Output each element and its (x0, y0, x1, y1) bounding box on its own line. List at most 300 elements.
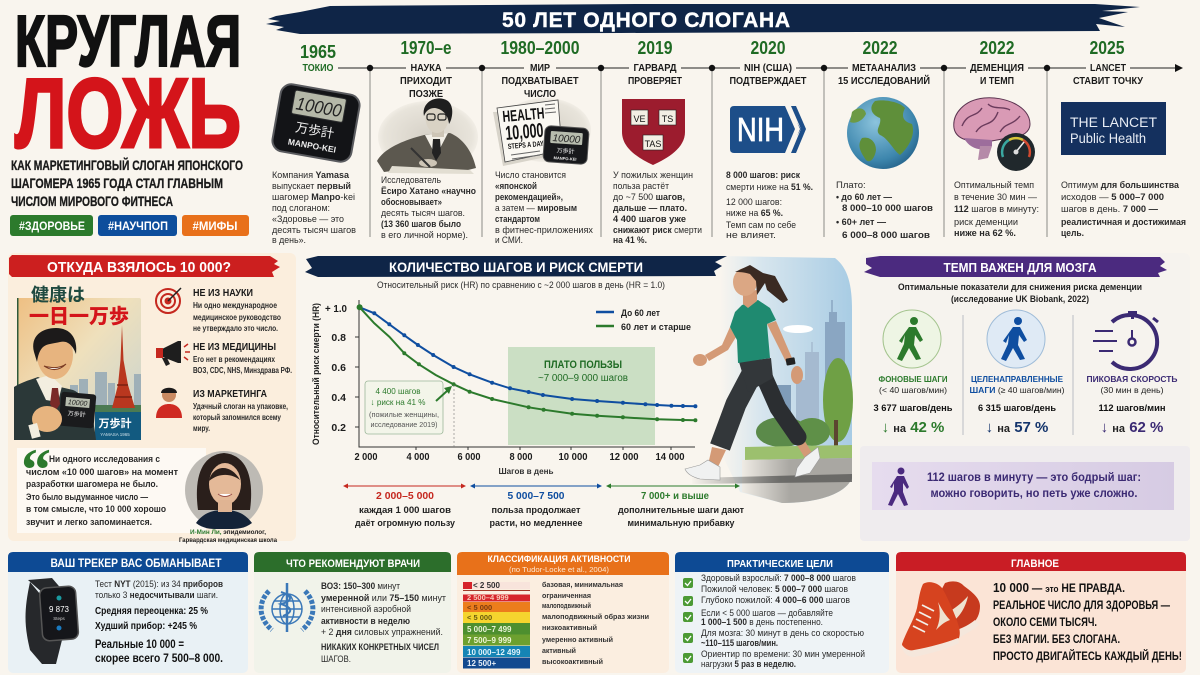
icon: newspaper with pedometer: 万歩計 (556, 145, 575, 156)
x-axis labels: 6 000 (458, 451, 481, 463)
x-axis labels: 2 000 (354, 451, 378, 463)
stat: background steps: ФОНОВЫЕ ШАГИ (878, 374, 948, 384)
icon: pedometer: MANPO-KEI (287, 137, 337, 155)
subheading (838, 62, 930, 87)
poster illustration (14, 281, 141, 440)
timeline axis (296, 60, 1183, 237)
hashtags (10, 215, 249, 236)
icon: Harvard shield (622, 99, 685, 165)
who recommendations: интенсивной аэробной (321, 604, 411, 615)
icon: Lancet logo (1061, 102, 1166, 155)
benefit range: 5 000-7 500: 5 000–7 500 (508, 490, 565, 502)
x-axis labels: 8 000 (510, 451, 533, 463)
callout: 4 400 steps: 4 400 шагов (376, 386, 421, 396)
poster illustration: 万歩計 (98, 415, 132, 431)
step ranges (463, 581, 530, 668)
reason: not from medicine: Его нет в рекомендациях (193, 355, 275, 364)
activity labels (542, 580, 649, 666)
activity labels: активный (542, 646, 576, 655)
text: 2019 (613, 170, 702, 246)
stat: peak speed: ↓ на 62 % (1101, 419, 1163, 436)
x-axis labels: Шагов в день (498, 466, 554, 476)
stat: peak speed: ПИКОВАЯ СКОРОСТЬ (1086, 374, 1178, 384)
icon: newspaper with pedometer: 10000 (552, 133, 581, 146)
benefit range: 2 000-5 000: каждая 1 000 шагов (359, 505, 451, 516)
who recommendations: активности в неделю (321, 616, 410, 627)
icon: target (156, 288, 181, 313)
x-axis labels: 4 000 (406, 451, 430, 463)
callout: 4 400 steps (365, 381, 454, 447)
reason: from marketing: который запомнился всему (193, 413, 281, 422)
icon: fitness band: 9 873 (49, 605, 70, 614)
stat: purposeful steps: ШАГИ (≥ 40 шагов/мин) (970, 385, 1065, 395)
icon: newspaper with pedometer: MANPO-KEI (553, 155, 577, 162)
subheading: ПРОВЕРЯЕТ (628, 75, 682, 87)
hashtags: #НАУЧПОП (108, 219, 168, 233)
text: 1970s: обосновывает» (381, 197, 442, 208)
panel heading (896, 552, 1186, 571)
panel heading: КОЛИЧЕСТВО ШАГОВ И РИСК СМЕРТИ (389, 260, 643, 275)
callout: brisk pace: можно говорить, но петь уже сложно. (930, 486, 1138, 500)
text: meta-analysis: Плато: (836, 180, 866, 191)
icon: purple walker (888, 468, 909, 506)
who recommendations: ШАГОВ. (321, 654, 351, 665)
goals list: Здоровый взрослый: 7 000–8 000 шагов (701, 573, 856, 584)
step ranges: < 5 000 (467, 603, 492, 612)
goals list: Для мозга: 30 минут в день со скоростью (701, 628, 864, 639)
text: 2019: польза растёт (613, 181, 670, 192)
benefit range: 2 000-5 000: даёт огромную пользу (355, 518, 456, 529)
tracker facts: Худший прибор: +245 % (95, 620, 197, 632)
subheading (730, 62, 807, 87)
main title: ЛОЖЬ (15, 58, 241, 168)
text: 1970s (381, 175, 476, 241)
benefit range: 7 000+: минимальную прибавку (628, 518, 735, 529)
subheading: NIH (США) (744, 62, 792, 74)
subheading: И ТЕМП (980, 75, 1014, 87)
icon: pedometer (271, 83, 361, 163)
icon: newspaper with pedometer: STEPS A DAY (507, 139, 544, 151)
icon: pedometer: 10000 (294, 93, 343, 121)
goals list: ~110–115 шагов/мин. (701, 638, 778, 649)
text: dementia (954, 180, 1039, 239)
icon: Lancet logo: THE LANCET (1070, 115, 1157, 130)
text: 1965: «Здоровье — это (272, 214, 344, 225)
x-axis labels: 10 000 (558, 451, 588, 463)
reason: not from science: не утверждало это число. (193, 324, 278, 333)
icon: NIH logo: NIH (737, 111, 784, 148)
icon: newspaper with pedometer: HEALTH (502, 105, 545, 126)
benefit range: 2 000-5 000: 2 000–5 000 (376, 490, 434, 502)
stat: purposeful steps (970, 310, 1065, 436)
who recommendations: ВОЗ: 150–300 минут (321, 581, 401, 592)
text: meta-analysis: • до 60 лет — (836, 192, 892, 203)
plateau zone: ~7 000–9 000 шагов (538, 373, 628, 384)
icon: megaphone (156, 341, 190, 366)
tracker facts: скорее всего 7 500–8 000. (95, 653, 223, 665)
portrait: I-Min Lee (185, 451, 263, 529)
panel heading: (по Tudor-Locke et al., 2004) (509, 567, 609, 574)
text: meta-analysis: 6 000–8 000 шагов (842, 230, 930, 241)
text: 1965 (272, 170, 356, 246)
subtitle: Оптимальные показатели для снижения риска деменции (898, 282, 1142, 292)
panel: practical goals (675, 552, 889, 673)
quote block: числом «10 000 шагов» на момент (26, 467, 178, 478)
icon: Harvard shield: VE (633, 114, 646, 124)
takeaway text (993, 580, 1182, 663)
goals list (701, 573, 865, 670)
y-axis labels: Относительный риск смерти (HR) (311, 303, 322, 445)
panel heading: КЛАССИФИКАЦИЯ АКТИВНОСТИ (488, 554, 631, 565)
subheading: 15 ИССЛЕДОВАНИЙ (838, 74, 930, 87)
y-axis labels: 0.2 (331, 422, 346, 434)
callout: brisk pace (860, 446, 1190, 541)
text: meta-analysis: • 60+ лет — (836, 217, 886, 228)
reason: not from medicine: НЕ ИЗ МЕДИЦИНЫ (193, 342, 276, 353)
text: meta-analysis: 8 000–10 000 шагов (842, 203, 933, 214)
text: 1970s: десять тысяч шагов. (381, 208, 465, 219)
text: 2025: цель. (1061, 228, 1084, 239)
timeline heading banner (266, 4, 1140, 34)
panel heading (254, 552, 451, 572)
text: dementia: Оптимальный темп (954, 180, 1034, 191)
panel: key takeaway (896, 552, 1186, 673)
activity labels: умеренно активный (542, 635, 613, 644)
curve: under 60 (360, 307, 697, 408)
icon: Harvard shield: TAS (645, 139, 661, 149)
runner figure (685, 265, 820, 480)
y-axis labels (311, 303, 347, 445)
subheading (1073, 62, 1143, 87)
plateau zone (508, 347, 655, 445)
milestone: 1965 Tokyo: ТОКИО (302, 62, 334, 74)
y-axis labels: 0.4 (331, 392, 346, 404)
panel heading (457, 552, 669, 575)
panel: activity classification (457, 552, 669, 673)
milestone: 2020 NIH (726, 38, 813, 241)
goals list: Ориентир по времени: 30 мин умеренной (701, 649, 865, 660)
subheading (628, 62, 682, 87)
quote block: разработки шагомера не было. (26, 479, 158, 490)
icon: fitness band (26, 578, 79, 664)
stat: background steps: (< 40 шагов/мин) (879, 385, 947, 395)
text: 2020: Темп сам по себе (726, 220, 796, 231)
text: 1970s: Исследователь (381, 175, 441, 186)
subheading: СТАВИТ ТОЧКУ (1073, 75, 1143, 87)
main title: КРУГЛАЯ (15, 2, 241, 82)
milestone: 2022 dementia: 2022 (980, 38, 1014, 58)
milestone: 1965 Tokyo (271, 42, 361, 246)
text: 2025 (1061, 180, 1186, 239)
milestone: 1980-2000 (493, 38, 593, 246)
panel heading: ГЛАВНОЕ (1011, 558, 1059, 570)
goals list: Глубоко пожилой: 4 000–6 000 шагов (701, 595, 850, 606)
subheading: НАУКА (410, 62, 442, 74)
text: 2019: 4 400 шагов уже (613, 214, 686, 225)
benefit range: 5 000-7 500: польза продолжает (492, 505, 581, 516)
poster illustration: YAMASA 1965 (100, 432, 130, 437)
goals list: нагрузки 5 раз в неделю. (701, 659, 796, 670)
step ranges: 2 500–4 999 (467, 593, 509, 602)
portrait caption (179, 529, 277, 544)
step ranges: 12 500+ (467, 659, 496, 668)
callout: brisk pace: 112 шагов в минуту — это бодрый шаг: (927, 470, 1141, 484)
x-axis labels: 14 000 (656, 451, 685, 463)
icon: WHO emblem (261, 583, 313, 632)
subheading: ЧИСЛО (524, 88, 556, 100)
stat: peak speed (1086, 311, 1178, 436)
text: 2020: 12 000 шагов: (726, 197, 782, 208)
panel heading (675, 552, 889, 572)
quote block: “ (21, 437, 51, 503)
quote block: звучит и легко запоминается. (26, 517, 152, 528)
subtitle: (исследование UK Biobank, 2022) (951, 294, 1089, 304)
text: dementia: в течение 30 мин — (954, 192, 1037, 203)
portrait caption: И-Мин Ли, эпидемиолог, (190, 529, 266, 536)
step ranges: 7 500–9 999 (467, 636, 512, 645)
reason: not from science: медицинское руководство (193, 313, 281, 322)
text: 1980-2000: «японской (495, 181, 537, 192)
subtitle: ШАГОМЕРА 1965 ГОДА СТАЛ ГЛАВНЫМ (11, 176, 223, 191)
tracker facts: только 3 недосчитывали шаги. (95, 590, 218, 601)
icon: newspaper with pedometer: 10,000 (505, 120, 544, 145)
plateau zone: ПЛАТО ПОЛЬЗЫ (544, 359, 622, 371)
stat: peak speed: (30 мин в день) (1100, 385, 1164, 395)
y-axis labels: 0.6 (331, 362, 346, 374)
icon: newspaper with pedometer (493, 98, 591, 166)
goals list: 1 000–1 500 в день постепенно. (701, 617, 823, 628)
stat: background steps: ↓ на 42 % (882, 419, 944, 436)
icon: stopwatch (1093, 311, 1158, 369)
panel heading (864, 256, 1167, 277)
panel: steps and mortality (305, 256, 853, 529)
text: 1980-2000: и СМИ. (495, 235, 523, 246)
milestone: 2019 Harvard (613, 38, 702, 246)
who recommendations: + 2 дня силовых упражнений. (321, 627, 443, 638)
icon: Lancet logo: Public Health (1070, 131, 1146, 146)
hashtags: #МИФЫ (192, 219, 238, 233)
subtitle (898, 282, 1142, 304)
text: 1980-2000: рекомендацией», (495, 192, 563, 203)
panel: origin of 10 000 (8, 253, 296, 544)
milestone: 2020 NIH: 2020 (750, 38, 786, 58)
icon: fitness band: Steps (53, 616, 65, 621)
text: 2025: реалистичная и достижимая (1061, 217, 1186, 228)
poster illustration: 10000 (68, 399, 88, 408)
text: meta-analysis (836, 180, 933, 241)
activity labels: высокоактивный (542, 657, 603, 666)
benefit range: 7 000+: дополнительные шаги дают (618, 505, 744, 516)
subtitle (11, 158, 243, 209)
icon: researcher sketch (377, 98, 478, 174)
stat: peak speed: 112 шагов/мин (1098, 403, 1166, 414)
who recommendations: НИКАКИХ КОНКРЕТНЫХ ЧИСЕЛ (321, 642, 439, 653)
benefit range: 2 000-5 000 (343, 484, 466, 529)
text: 1965: десять тысяч шагов (272, 225, 356, 236)
reason: not from science: НЕ ИЗ НАУКИ (193, 288, 253, 299)
text: 2025: Оптимум для большинства (1061, 180, 1180, 191)
quote block (17, 437, 206, 533)
text: 2019: до ~7 500 шагов, (613, 192, 685, 203)
panel heading: ОТКУДА ВЗЯЛОСЬ 10 000? (47, 259, 231, 276)
hashtags: #ЗДОРОВЬЕ (19, 219, 85, 233)
curve: 60 and older (357, 304, 697, 422)
icon: globe (847, 97, 919, 169)
text: 2020: 8 000 шагов: риск (726, 170, 800, 181)
panel heading (8, 552, 248, 572)
text: 1980-2000 (495, 170, 593, 246)
goals list: Пожилой человек: 5 000–7 000 шагов (701, 584, 848, 595)
text: dementia: риск деменции (954, 217, 1018, 228)
milestone: 2025 Lancet: 2025 (1090, 38, 1124, 58)
icon: person (156, 388, 182, 418)
stat: purposeful steps: ЦЕЛЕНАПРАВЛЕННЫЕ (971, 374, 1063, 384)
panel heading (9, 255, 280, 277)
panel heading: ТЕМП ВАЖЕН ДЛЯ МОЗГА (944, 261, 1096, 275)
step ranges: 10 000–12 499 (467, 648, 521, 657)
icon: pedometer: 万歩計 (294, 117, 336, 142)
takeaway text: 10 000 — это НЕ ПРАВДА. (993, 580, 1125, 595)
activity labels: базовая, минимальная (542, 580, 623, 589)
panel heading: ВАШ ТРЕКЕР ВАС ОБМАНЫВАЕТ (50, 556, 222, 570)
subheading: ПРИХОДИТ (400, 75, 453, 87)
text: 2019: дальше — плато. (613, 203, 687, 214)
portrait caption: Гарвардская медицинская школа (179, 537, 277, 544)
text: 2020 (726, 170, 813, 241)
icon: brain and gauge (954, 98, 1035, 171)
panel: pace and brain (860, 253, 1190, 541)
text: 2025: исходов — 5 000–7 000 (1061, 192, 1164, 203)
text: 1965: под слоганом: (272, 203, 330, 214)
reason: not from medicine (156, 341, 292, 375)
timeline heading banner: 50 ЛЕТ ОДНОГО СЛОГАНА (502, 9, 790, 32)
text: 1970s: (13 360 шагов было (381, 219, 461, 230)
text: 2020: смерти ниже на 51 %. (726, 182, 813, 193)
activity labels: малоподвижный образ жизни (542, 612, 649, 621)
poster illustration: 健康は (31, 281, 85, 307)
text: 2025: шагов в день. 7 000 — (1061, 204, 1158, 215)
text: 1980-2000: Число становится (495, 170, 566, 181)
x-axis labels: 12 000 (610, 451, 639, 463)
text: dementia: ниже на 62 %. (954, 228, 1016, 239)
text: 2019: снижают риск смерти (613, 225, 702, 236)
reason: not from science (156, 288, 281, 333)
callout: 4 400 steps: ↓ риск на 41 % (370, 397, 426, 407)
benefit range: 5 000-7 500 (470, 484, 602, 529)
subheading (970, 62, 1024, 87)
quote block: Это было выдуманное число — (26, 492, 148, 503)
reason: not from science: Ни одно международное (193, 301, 277, 310)
text: 2020: не влияет. (726, 230, 776, 241)
y-axis labels: + 1.0 (325, 303, 347, 315)
milestone: 1980-2000: 1980–2000 (500, 38, 580, 58)
main title (15, 2, 241, 168)
reason: from marketing (156, 388, 288, 433)
milestone: 2022 meta-analysis: 2022 (862, 38, 898, 58)
goals list: Если < 5 000 шагов — добавляйте (701, 608, 833, 619)
text: 1980-2000: а затем — мировым (495, 203, 577, 214)
icon: NIH logo (730, 106, 806, 153)
who recommendations (321, 581, 447, 665)
subheading: МИР (530, 62, 550, 74)
activity labels: низкоактивный (542, 623, 597, 632)
text: 2019: У пожилых женщин (613, 170, 693, 181)
subtitle: КАК МАРКЕТИНГОВЫЙ СЛОГАН ЯПОНСКОГО (11, 158, 243, 173)
subheading (502, 62, 579, 100)
stat: background steps: 3 677 шагов/день (874, 403, 953, 414)
benefit range: 5 000-7 500: расти, но медленнее (490, 518, 582, 529)
text: 1980-2000: стандартом (495, 214, 540, 225)
text: 1965: в день». (272, 235, 306, 246)
milestone: 2022 meta-analysis (836, 38, 933, 241)
panel heading: ЧТО РЕКОМЕНДУЮТ ВРАЧИ (286, 558, 420, 570)
tracker facts: Средняя переоценка: 25 % (95, 606, 208, 617)
who recommendations: умеренной или 75–150 минут (321, 593, 447, 604)
title block (10, 2, 249, 236)
text: 1970s: Ёсиро Хатано «научно (381, 186, 476, 197)
subtitle: ЧИСЛОМ МИРОВОГО ФИТНЕСА (11, 194, 173, 209)
y-axis labels: 0.8 (331, 332, 346, 344)
subheading (400, 62, 453, 100)
stat: background steps (874, 310, 953, 436)
poster illustration: 一日一万歩 (29, 300, 129, 329)
timeline section (266, 4, 1186, 246)
text: dementia: 112 шагов в минуту: (954, 204, 1039, 215)
milestone: 1970s: 1970–е (400, 38, 452, 58)
activity labels: малоподвижный (542, 601, 591, 610)
icon: running shoes (902, 581, 980, 657)
takeaway text: БЕЗ МАГИИ. БЕЗ СЛОГАНА. (993, 634, 1120, 646)
stat: purposeful steps: ↓ на 57 % (986, 419, 1048, 436)
text: 1965: Компания Yamasa (272, 170, 350, 181)
benefit range: 7 000+ (606, 484, 744, 529)
icon: green walker (883, 310, 941, 368)
runner scene (685, 256, 853, 503)
panel heading: ПРАКТИЧЕСКИЕ ЦЕЛИ (727, 558, 833, 570)
reason: from marketing: ИЗ МАРКЕТИНГА (193, 389, 267, 400)
subheading: ГАРВАРД (634, 62, 677, 74)
callout: 4 400 steps: (пожилые женщины, (369, 410, 439, 419)
chart subtitle: Относительный риск (HR) по сравнению с ~2 000 шагов в день (HR = 1.0) (377, 280, 665, 291)
subheading: ДЕМЕНЦИЯ (970, 62, 1024, 74)
poster illustration: 万歩計 (67, 408, 86, 419)
subheading: LANCET (1090, 62, 1126, 74)
reason: from marketing: миру. (193, 424, 210, 433)
icon: blue walker (987, 310, 1045, 368)
step ranges: 5 000–7 499 (467, 625, 512, 634)
subheading: ПОДТВЕРЖДАЕТ (730, 75, 807, 87)
milestone: 2019 Harvard: 2019 (638, 38, 672, 58)
callout: 4 400 steps: исследование 2019) (370, 420, 438, 429)
panel: doctors recommend (254, 552, 451, 673)
subheading: МЕТААНАЛИЗ (852, 62, 916, 74)
legend (596, 308, 691, 333)
step ranges: < 5 000 (467, 613, 492, 622)
text: 1970s: в его личной норме). (381, 230, 468, 241)
benefit range: 7 000+: 7 000+ и выше (641, 490, 709, 502)
subheading: ПОДХВАТЫВАЕТ (502, 75, 579, 87)
quote block: Ни одного исследования с (49, 454, 160, 465)
milestone: 2025 Lancet (1061, 38, 1186, 239)
legend: 60 лет и старше (621, 322, 691, 333)
step ranges: < 2 500 (473, 581, 500, 590)
milestone: 1970s (377, 38, 478, 241)
x-axis labels (354, 451, 685, 476)
stat: purposeful steps: 6 315 шагов/день (978, 403, 1056, 414)
subheading: ПОЗЖЕ (409, 88, 443, 100)
reason: not from medicine: ВОЗ, CDC, NHS, Минздрава РФ. (193, 366, 292, 375)
legend: До 60 лет (621, 308, 660, 319)
